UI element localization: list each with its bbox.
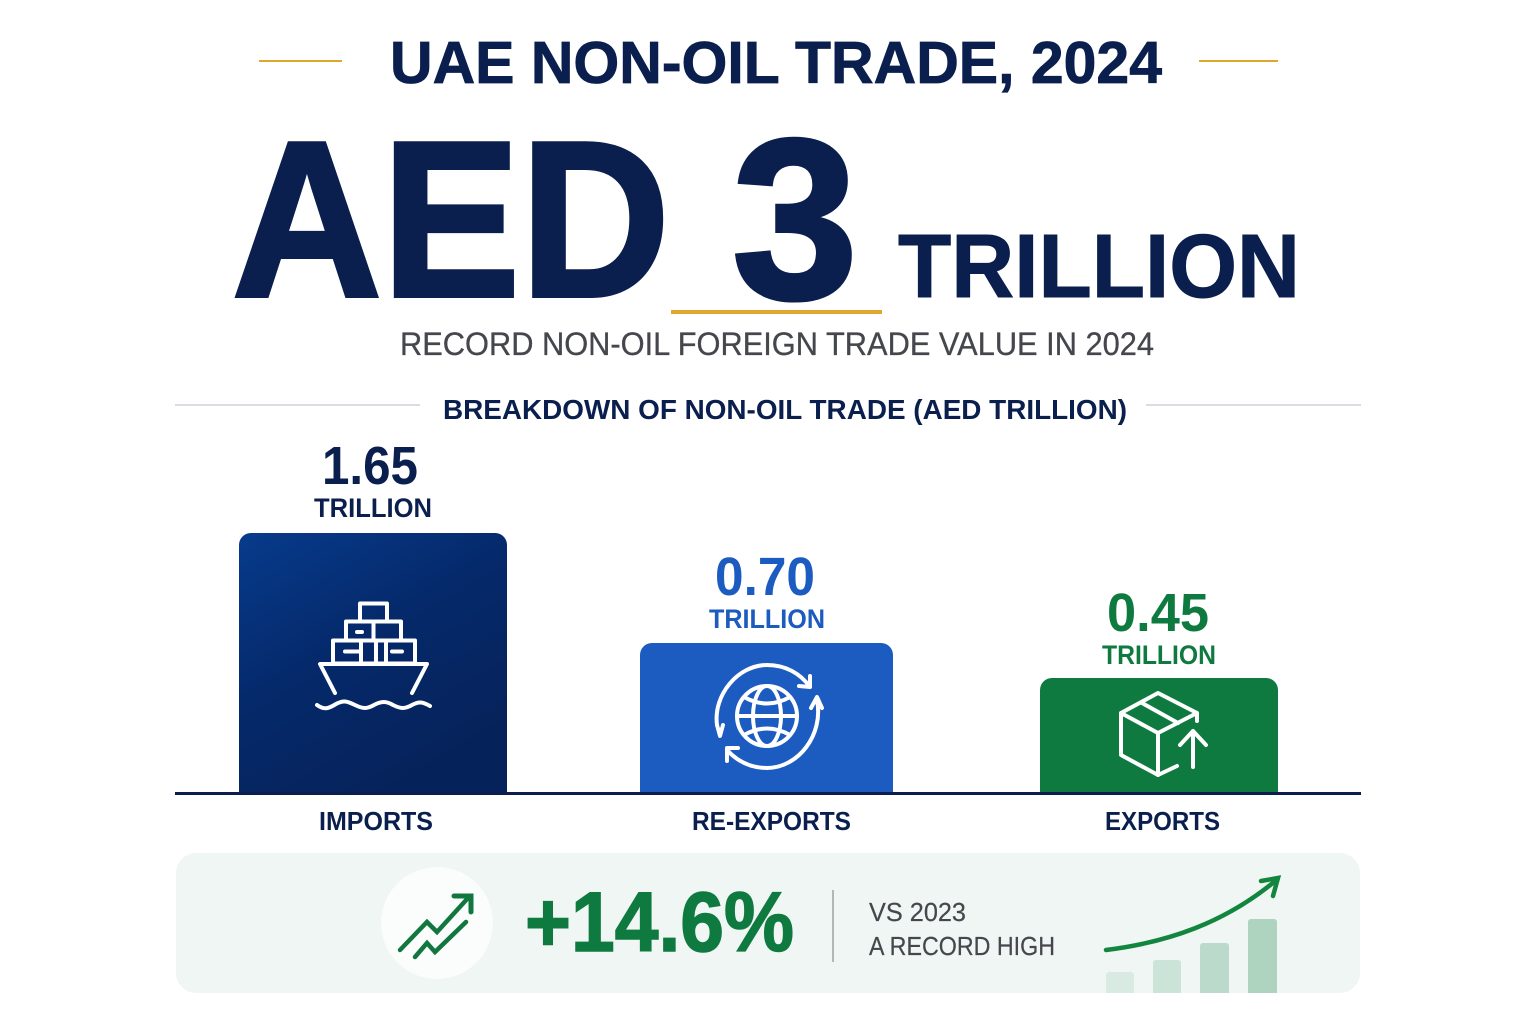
bar: imports: TRILLION [314,493,432,523]
growth note: A RECORD HIGH [869,931,1055,961]
headline figure: AED [232,96,670,344]
label: exports: EXPORTS [1105,806,1220,836]
subtitle: RECORD NON-OIL FOREIGN TRADE VALUE IN 2024 [400,326,1154,362]
headline figure: TRILLION [898,217,1300,317]
bar: exports [1040,583,1278,836]
panel: growth callout [176,853,1360,993]
bar: re-exports: 0.70 [715,547,815,607]
icon: box with up arrow [1121,693,1206,775]
label: imports: IMPORTS [319,806,433,836]
section heading: BREAKDOWN OF NON-OIL TRADE (AED TRILLION) [443,394,1127,425]
bar: imports: 1.65 [322,436,418,496]
bar chart [175,436,1361,836]
mini bar chart with arrow [1106,878,1278,993]
bar: exports: 0.45 [1107,583,1209,643]
bar: re-exports [640,547,893,836]
bar: exports: TRILLION [1102,640,1216,670]
icon: trend arrow in circle [381,867,493,979]
icon: globe with arrows [717,665,822,768]
title: UAE NON-OIL TRADE, 2024 [390,30,1162,96]
icon: container ship [317,604,430,708]
growth figure: +14.6% [525,875,794,969]
bar: imports [239,436,507,836]
growth note [869,897,1055,961]
label: re-exports: RE-EXPORTS [692,806,851,836]
headline figure: 3 [732,93,858,347]
growth note: VS 2023 [869,897,966,927]
bar: re-exports: TRILLION [709,604,825,634]
headline figure [232,93,1300,347]
